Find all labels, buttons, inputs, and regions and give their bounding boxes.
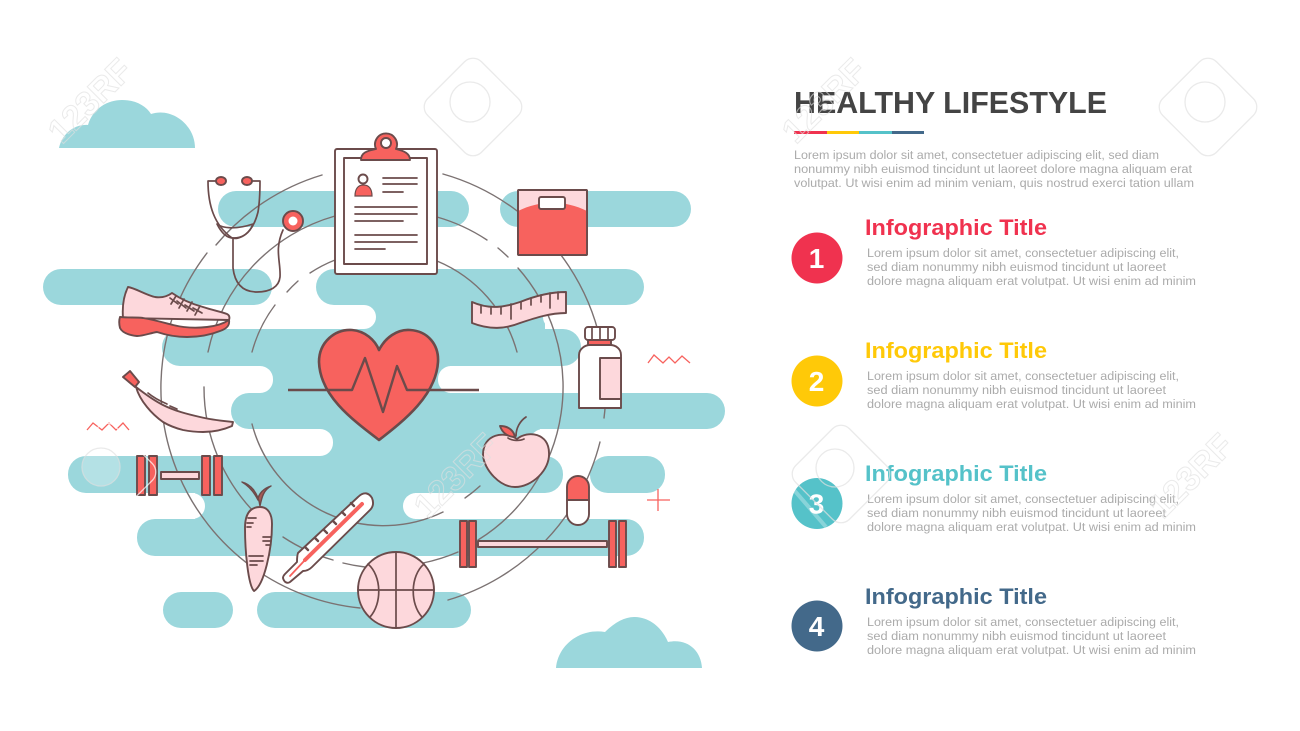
icon: heart with pulse (288, 330, 479, 440)
icon: running shoe (119, 287, 229, 337)
panel: item 2 (792, 338, 1196, 411)
icon: pill bottle (579, 327, 621, 408)
icon: thermometer (283, 493, 373, 583)
decoration: red zigzags and plus (87, 355, 690, 511)
icon: banana (123, 371, 233, 432)
intro text: nonummy nibh euismod tincidunt ut laoreet dolore magna aliquam erat (794, 162, 1193, 176)
panel: item 1: sed diam nonummy nibh euismod tincidunt ut laoreet (867, 260, 1167, 274)
panel: item 3: Infographic Title (865, 461, 1047, 486)
icon: carrot (242, 482, 272, 591)
icon: capsule (567, 476, 589, 525)
panel: item 3: Lorem ipsum dolor sit amet, consectetuer adipiscing elit, (867, 492, 1179, 506)
panel: item 1: 1 (809, 243, 824, 274)
icon: stethoscope (208, 177, 303, 292)
icon: apple (483, 417, 549, 487)
panel: item 1: Infographic Title (865, 215, 1047, 240)
watermark stamps: 123RF (407, 427, 506, 526)
panel: item 2: Infographic Title (865, 338, 1047, 363)
intro text (794, 148, 1194, 190)
panel: item 3 (792, 461, 1196, 534)
watermark stamps: 123RF (775, 52, 874, 151)
watermark stamps: 123RF (41, 52, 140, 151)
icon: weighing scale (518, 190, 587, 255)
panel: item 2: sed diam nonummy nibh euismod tincidunt ut laoreet (867, 383, 1167, 397)
panel: item 3: sed diam nonummy nibh euismod tincidunt ut laoreet (867, 506, 1167, 520)
panel: item 3: 3 (809, 488, 824, 520)
panel: item 1 (792, 215, 1196, 288)
panel: item 4 (792, 584, 1196, 657)
concentric arcs (161, 174, 606, 608)
panel: item 4: 4 (809, 611, 825, 642)
intro text: volutpat. Ut wisi enim ad minim veniam, quis nostrud exerci tation ullam (794, 176, 1194, 190)
panel: item 2: Lorem ipsum dolor sit amet, consectetuer adipiscing elit, (867, 369, 1179, 383)
panel: item 4: Infographic Title (865, 584, 1047, 609)
panel: heading (794, 85, 1194, 190)
panel: item 2: 2 (809, 366, 824, 397)
panel: item 2: dolore magna aliquam erat volutpat. Ut wisi enim ad minim (867, 397, 1196, 411)
icon: measuring tape (472, 292, 566, 328)
icon: clipboard (335, 133, 437, 274)
panel: item 1: dolore magna aliquam erat volutpat. Ut wisi enim ad minim (867, 274, 1196, 288)
panel: item 1: Lorem ipsum dolor sit amet, consectetuer adipiscing elit, (867, 246, 1179, 260)
icon: basketball (358, 552, 434, 628)
icon: small dumbbell (137, 456, 222, 495)
panel: item 4: dolore magna aliquam erat volutpat. Ut wisi enim ad minim (867, 643, 1196, 657)
title underline (794, 131, 924, 134)
watermark stamps: 123RF (1142, 427, 1241, 526)
panel: illustration background of teal bars and clouds (43, 100, 740, 668)
panel: item 4: Lorem ipsum dolor sit amet, consectetuer adipiscing elit, (867, 615, 1179, 629)
panel: item 4: sed diam nonummy nibh euismod tincidunt ut laoreet (867, 629, 1167, 643)
intro text: Lorem ipsum dolor sit amet, consectetuer adipiscing elit, sed diam (794, 148, 1159, 162)
title: HEALTHY LIFESTYLE (794, 85, 1107, 120)
icon: large barbell (460, 521, 626, 567)
panel: item 3: dolore magna aliquam erat volutpat. Ut wisi enim ad minim (867, 520, 1196, 534)
watermark stamps (41, 52, 1262, 528)
